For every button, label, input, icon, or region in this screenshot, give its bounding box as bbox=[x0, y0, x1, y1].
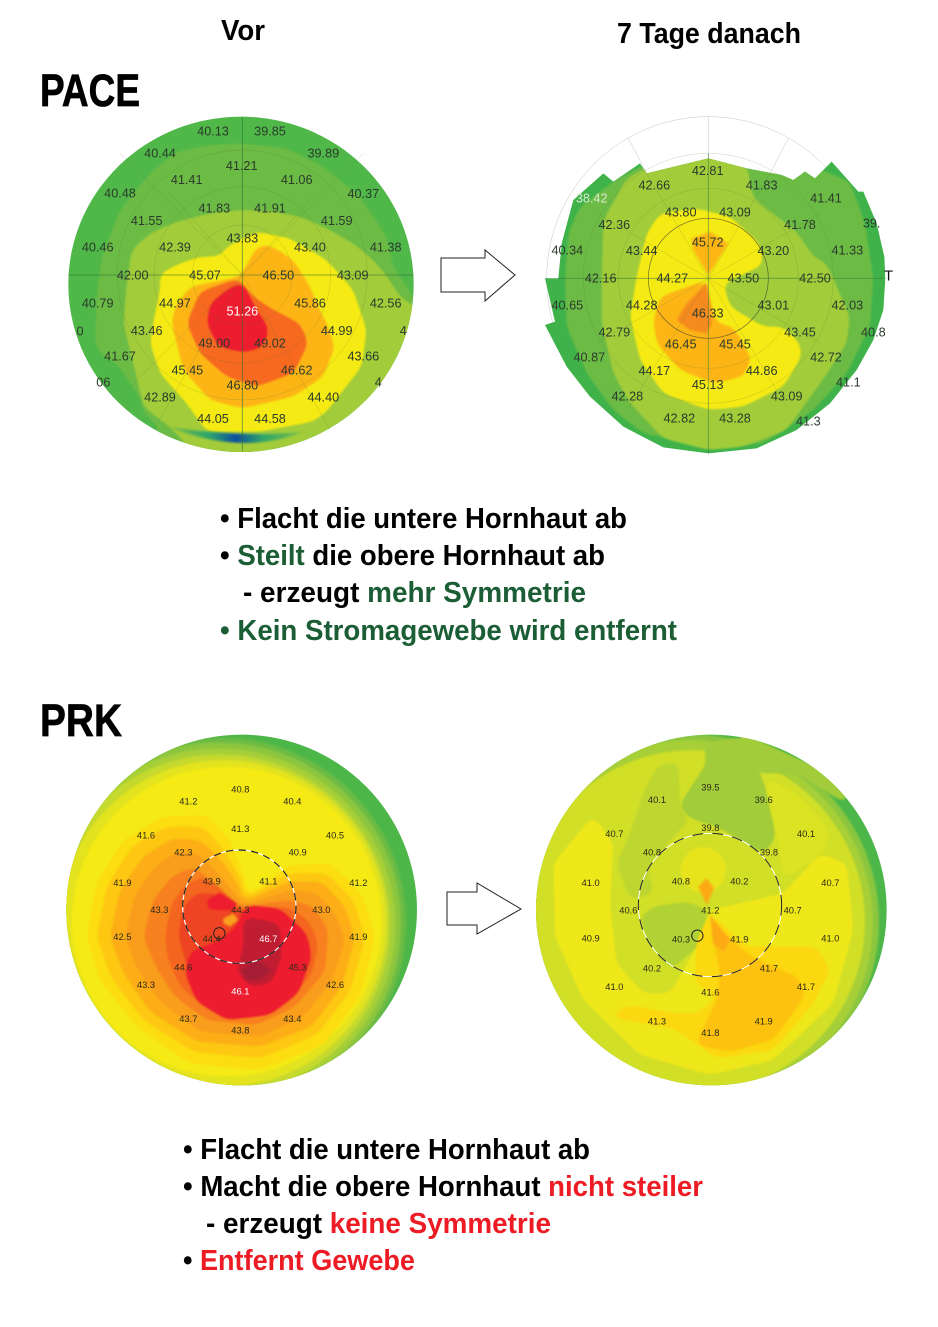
map values: 43.20 bbox=[757, 244, 789, 258]
map values: 44.97 bbox=[159, 296, 191, 310]
map values: 39.8 bbox=[760, 847, 778, 857]
map values: 40.5 bbox=[326, 830, 344, 840]
map values: 41.06 bbox=[281, 173, 313, 187]
map values: 41.9 bbox=[755, 1016, 773, 1026]
map values: T bbox=[884, 269, 893, 285]
map values: 43.09 bbox=[719, 206, 751, 220]
map values: 40.37 bbox=[347, 187, 379, 201]
map values: 42.50 bbox=[799, 271, 831, 285]
map grid rings and spokes bbox=[117, 150, 367, 430]
corneal map: PRK 7 days after bbox=[536, 734, 887, 1086]
map values: 46.7 bbox=[259, 934, 277, 944]
map values: 40.13 bbox=[197, 125, 229, 139]
map values: 43.45 bbox=[784, 325, 816, 339]
map values: 40.8 bbox=[643, 847, 661, 857]
map values bbox=[582, 783, 839, 1038]
map values: 46.80 bbox=[226, 378, 258, 392]
map values: 44.3 bbox=[231, 905, 249, 915]
map values: 43.4 bbox=[283, 1014, 301, 1024]
map values: 43.01 bbox=[757, 299, 789, 313]
map values: 42.56 bbox=[370, 296, 401, 310]
map values: 40.7 bbox=[605, 829, 623, 839]
map values: 46.33 bbox=[692, 306, 724, 320]
map values: 42.72 bbox=[810, 350, 842, 364]
map values: 40.8 bbox=[861, 325, 886, 339]
map values: 42.16 bbox=[585, 271, 617, 285]
map values: 40.7 bbox=[784, 905, 802, 915]
map values: 51.26 bbox=[226, 305, 258, 319]
map values: 40.79 bbox=[82, 296, 114, 310]
heading: 7 Tage danach: 7 Tage danach bbox=[617, 18, 801, 50]
map values: 39.5 bbox=[701, 783, 719, 793]
map values: 40.1 bbox=[648, 795, 666, 805]
bullet list: PACE bbox=[220, 503, 677, 647]
map values: 44.99 bbox=[321, 324, 352, 338]
map values: 41.33 bbox=[831, 244, 863, 258]
map values: 43.44 bbox=[626, 244, 658, 258]
map values: 40.4 bbox=[283, 796, 301, 806]
map values: 39.85 bbox=[254, 125, 286, 139]
map values: 42.28 bbox=[611, 390, 643, 404]
map values: 41.3 bbox=[648, 1016, 666, 1026]
map values: 38.42 bbox=[576, 191, 608, 205]
bullet list: PACE: • Flacht die untere Hornhaut ab bbox=[220, 503, 627, 535]
map values bbox=[551, 164, 893, 429]
map values: 40.65 bbox=[551, 299, 583, 313]
bullet list: PRK: - erzeugt keine Symmetrie bbox=[206, 1208, 551, 1240]
bullet list: PRK bbox=[183, 1134, 703, 1277]
map values: 40.8 bbox=[231, 785, 249, 795]
heading: Vor: Vor bbox=[221, 15, 265, 47]
map values: 39. bbox=[863, 216, 880, 230]
corneal map: PACE 7 days after bbox=[530, 110, 897, 463]
map values: 43.3 bbox=[137, 980, 155, 990]
map values: 44.05 bbox=[197, 412, 229, 426]
map values bbox=[113, 785, 367, 1036]
map values: 06 bbox=[96, 376, 110, 390]
map values: 39.89 bbox=[307, 146, 339, 160]
map values: 41.83 bbox=[746, 179, 778, 193]
map values: 41.41 bbox=[810, 191, 842, 205]
map values: 41.9 bbox=[730, 934, 748, 944]
map values: 40.9 bbox=[582, 933, 600, 943]
map values: 46.45 bbox=[665, 337, 697, 351]
dashed central circle bbox=[638, 833, 782, 977]
map values: 41.7 bbox=[760, 964, 778, 974]
map values: 42.00 bbox=[117, 269, 149, 283]
map values bbox=[76, 125, 407, 426]
map values: 42.39 bbox=[159, 241, 191, 255]
map values: 44.86 bbox=[746, 364, 778, 378]
map values: 45.72 bbox=[692, 236, 724, 250]
map values: 42.3 bbox=[174, 848, 192, 858]
map values: 44.58 bbox=[254, 412, 286, 426]
map values: 40.2 bbox=[643, 964, 661, 974]
dashed central circle bbox=[183, 850, 296, 963]
map values: 45.3 bbox=[289, 962, 307, 972]
map values: 41.41 bbox=[171, 173, 203, 187]
map values: 40.2 bbox=[730, 876, 748, 886]
map values: 43.0 bbox=[312, 905, 330, 915]
corneal map: PRK before bbox=[66, 734, 417, 1086]
map values: 41.0 bbox=[821, 933, 839, 943]
bullet list: PRK: • Flacht die untere Hornhaut ab bbox=[183, 1134, 590, 1166]
heading: PACE: PACE bbox=[40, 65, 140, 116]
map grid rings and spokes bbox=[583, 153, 833, 407]
map values: 41.2 bbox=[701, 905, 719, 915]
map values: 0 bbox=[76, 325, 84, 339]
map values: 43.28 bbox=[719, 411, 751, 425]
map values: 41.0 bbox=[582, 878, 600, 888]
map values: 43.9 bbox=[203, 877, 221, 887]
map values: 41.6 bbox=[137, 830, 155, 840]
map values: 41.6 bbox=[701, 988, 719, 998]
map values: 43.46 bbox=[131, 324, 163, 338]
map values: 42.82 bbox=[663, 411, 695, 425]
map values: 4 bbox=[375, 376, 382, 390]
map values: 41.2 bbox=[349, 878, 367, 888]
map values: 42.89 bbox=[144, 391, 176, 405]
map values: 41.1 bbox=[259, 877, 277, 887]
map values: 40.8 bbox=[672, 876, 690, 886]
map values: 41.7 bbox=[797, 982, 815, 992]
map values: 43.80 bbox=[665, 206, 697, 220]
map values: 40.87 bbox=[573, 350, 605, 364]
map values: 44.40 bbox=[307, 391, 339, 405]
map values: 41.8 bbox=[701, 1028, 719, 1038]
map values: 49.00 bbox=[198, 336, 230, 350]
map values: 40.6 bbox=[619, 905, 637, 915]
map values: 43.7 bbox=[179, 1014, 197, 1024]
map values: 40.7 bbox=[821, 878, 839, 888]
bullet list: PACE: • Kein Stromagewebe wird entfernt bbox=[220, 615, 677, 647]
map values: 41.67 bbox=[104, 350, 136, 364]
map values: 39.8 bbox=[701, 823, 719, 833]
map values: 41.59 bbox=[321, 214, 352, 228]
map values: 42.6 bbox=[326, 980, 344, 990]
map values: 41.0 bbox=[605, 982, 623, 992]
map values: 49.02 bbox=[254, 336, 286, 350]
map values: 41.78 bbox=[784, 218, 816, 232]
map values: 41.55 bbox=[131, 214, 163, 228]
map values: 43.8 bbox=[231, 1026, 249, 1036]
heading: PRK: PRK bbox=[40, 695, 122, 746]
map values: 40.46 bbox=[82, 240, 114, 254]
map values: 40.48 bbox=[104, 186, 136, 200]
map values: 44.28 bbox=[626, 299, 658, 313]
map values: 41.83 bbox=[198, 201, 230, 215]
map values: 43.83 bbox=[226, 231, 258, 245]
map values: 41.3 bbox=[231, 824, 249, 834]
map values: 41.91 bbox=[254, 201, 286, 215]
map values: 42.66 bbox=[638, 179, 670, 193]
map values: 41.2 bbox=[179, 796, 197, 806]
map values: 46.1 bbox=[231, 986, 249, 996]
map values: 43.3 bbox=[150, 905, 168, 915]
map values: 42.36 bbox=[598, 218, 630, 232]
map values: 45.45 bbox=[171, 364, 203, 378]
corneal map: PACE before bbox=[68, 116, 414, 452]
map values: 44.4 bbox=[203, 934, 221, 944]
map values: 42.81 bbox=[692, 164, 724, 178]
map values: 41.38 bbox=[370, 240, 401, 254]
map values: 44.6 bbox=[174, 962, 192, 972]
arrow: PRK before to after bbox=[447, 883, 521, 934]
map values: 43.50 bbox=[727, 271, 759, 285]
map values: 40.3 bbox=[672, 934, 690, 944]
map values: 40.9 bbox=[289, 848, 307, 858]
bullet list: PACE: - erzeugt mehr Symmetrie bbox=[243, 577, 586, 609]
map values: 40.44 bbox=[144, 146, 176, 160]
map values: 42.03 bbox=[831, 299, 863, 313]
map values: 43.66 bbox=[347, 350, 379, 364]
map values: 44.27 bbox=[656, 271, 688, 285]
map values: 43.40 bbox=[294, 241, 326, 255]
arrow: PACE before to after bbox=[441, 250, 515, 301]
map values: 4 bbox=[400, 324, 407, 338]
map values: 41.9 bbox=[349, 932, 367, 942]
map values: 41.9 bbox=[113, 878, 131, 888]
bullet list: PRK: • Macht die obere Hornhaut nicht steiler bbox=[183, 1171, 703, 1203]
map values: 41.21 bbox=[226, 159, 258, 173]
map values: 40.1 bbox=[797, 829, 815, 839]
map values: 46.62 bbox=[281, 364, 313, 378]
bullet list: PRK: • Entfernt Gewebe bbox=[183, 1245, 415, 1277]
map values: 45.86 bbox=[294, 296, 326, 310]
bullet list: PACE: • Steilt die obere Hornhaut ab bbox=[220, 540, 605, 572]
map values: 43.09 bbox=[771, 390, 803, 404]
map values: 43.09 bbox=[337, 269, 368, 283]
map values: 44.17 bbox=[638, 364, 670, 378]
map values: 40.34 bbox=[551, 244, 583, 258]
map values: 41.1 bbox=[836, 376, 861, 390]
map values: 41.3 bbox=[796, 415, 821, 429]
map values: 42.5 bbox=[113, 932, 131, 942]
map values: 39.6 bbox=[755, 795, 773, 805]
map values: 45.07 bbox=[189, 269, 221, 283]
map values: 45.45 bbox=[719, 337, 751, 351]
map values: 45.13 bbox=[692, 378, 724, 392]
map values: 42.79 bbox=[598, 325, 630, 339]
map values: 46.50 bbox=[262, 269, 294, 283]
